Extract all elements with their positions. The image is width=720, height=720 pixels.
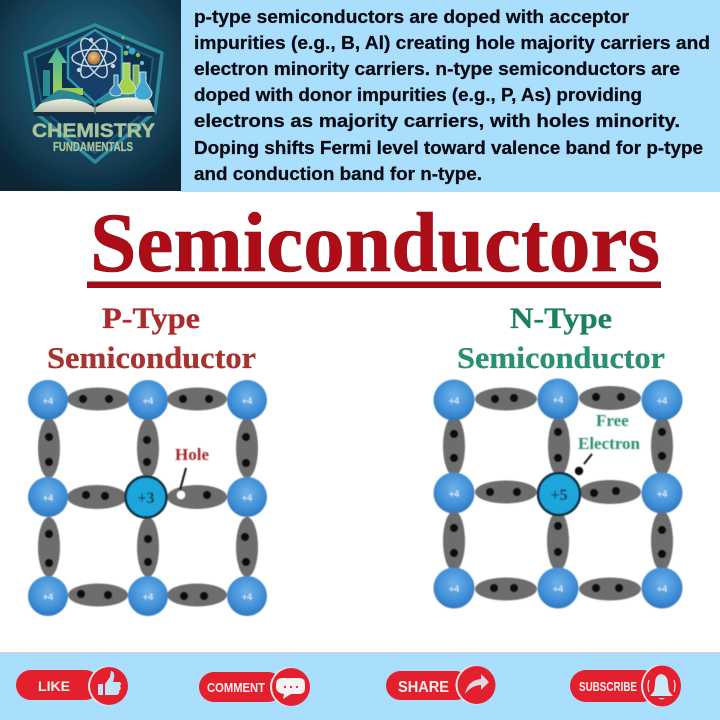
labels: n-type +4: +4: [553, 395, 563, 405]
electrons: n-type: [450, 393, 666, 592]
callout: hole: Hole: [175, 445, 209, 464]
labels: n-type +4: +4: [449, 584, 459, 594]
icon: share arrow: [465, 674, 489, 694]
panel: definition text: doped with donor impurities (e.g., P, As) providing: [194, 85, 642, 105]
icon: thumbs up: [98, 671, 121, 695]
logo: chemistry fundamentals: [0, 0, 181, 191]
labels: n-type +4: +4: [657, 396, 667, 406]
button: subscribe: SUBSCRIBE: [579, 680, 637, 694]
panel: definition text: and conduction band for n-type.: [194, 164, 482, 184]
icon: green growth arrow: [43, 48, 83, 96]
callout: free electron: [575, 411, 641, 475]
acceptor atom +3: [126, 476, 166, 518]
labels: n-type +4: +4: [657, 489, 667, 499]
atoms: p-type +4: [28, 380, 267, 616]
donor atom +5: +5: [550, 487, 568, 504]
panel: definition text: [181, 0, 720, 192]
chart: p-type lattice: [28, 380, 267, 616]
labels: p-type +4: +4: [43, 493, 53, 503]
bonds: n-type: [443, 386, 673, 600]
labels: n-type +4: +4: [449, 396, 459, 406]
button: comment: COMMENT: [207, 681, 265, 695]
donor atom +5: [538, 473, 580, 515]
labels: p-type +4: +4: [43, 592, 53, 602]
logo shield: [25, 25, 162, 162]
electrons: p-type: [45, 395, 250, 600]
callout: free electron: Electron: [578, 434, 641, 453]
icon: flasks: [110, 36, 152, 100]
heading: p-type semiconductor: [47, 302, 256, 375]
panel: definition text: impurities (e.g., B, Al) creating hole majority carriers and: [194, 33, 710, 53]
panel: definition text: Doping shifts Fermi level toward valence band for p-type: [194, 138, 703, 158]
logo wordmark: FUNDAMENTALS: [53, 140, 133, 154]
labels: p-type +4: +4: [43, 396, 53, 406]
logo wordmark: CHEMISTRY: [32, 121, 155, 142]
icon: speech bubble: [276, 678, 305, 699]
footer bar: [0, 652, 720, 720]
logo wordmark: [32, 121, 155, 154]
callout: hole: [175, 445, 209, 499]
labels: n-type +4: +4: [657, 584, 667, 594]
button: share: SHARE: [398, 679, 449, 696]
button: like: LIKE: [38, 678, 70, 694]
labels: n-type +4: [449, 395, 667, 594]
icon: bell: [650, 674, 673, 700]
heading: n-type semiconductor: [457, 302, 665, 375]
bonds: p-type: [38, 388, 258, 606]
acceptor atom +3: +3: [137, 490, 155, 507]
button: comment: [199, 668, 310, 706]
labels: p-type +4: +4: [143, 396, 153, 406]
button: share: [386, 666, 496, 704]
panel: definition text: electrons as majority carriers, with holes minority.: [194, 111, 680, 131]
heading: n-type semiconductor: N-Type: [510, 302, 612, 335]
heading: n-type semiconductor: Semiconductor: [457, 340, 665, 375]
icon: atom: [72, 35, 116, 81]
labels: p-type +4: [43, 396, 252, 602]
button: like: [16, 666, 128, 706]
panel: definition text: electron minority carriers. n-type semiconductors are: [194, 59, 680, 79]
chart: n-type lattice: [434, 378, 682, 608]
labels: p-type +4: +4: [242, 396, 252, 406]
heading: p-type semiconductor: Semiconductor: [47, 340, 256, 375]
button: subscribe: [570, 665, 681, 707]
atoms: n-type +4: [434, 378, 682, 608]
title: Semiconductors: [90, 196, 660, 290]
labels: n-type +4: +4: [553, 584, 563, 594]
icon: open book: [33, 90, 155, 117]
labels: p-type +4: +4: [242, 592, 252, 602]
panel: definition text: p-type semiconductors are doped with acceptor: [194, 7, 629, 27]
heading: p-type semiconductor: P-Type: [102, 302, 200, 335]
labels: p-type +4: +4: [242, 493, 252, 503]
callout: free electron: Free: [596, 411, 629, 430]
labels: p-type +4: +4: [143, 592, 153, 602]
labels: n-type +4: +4: [449, 489, 459, 499]
